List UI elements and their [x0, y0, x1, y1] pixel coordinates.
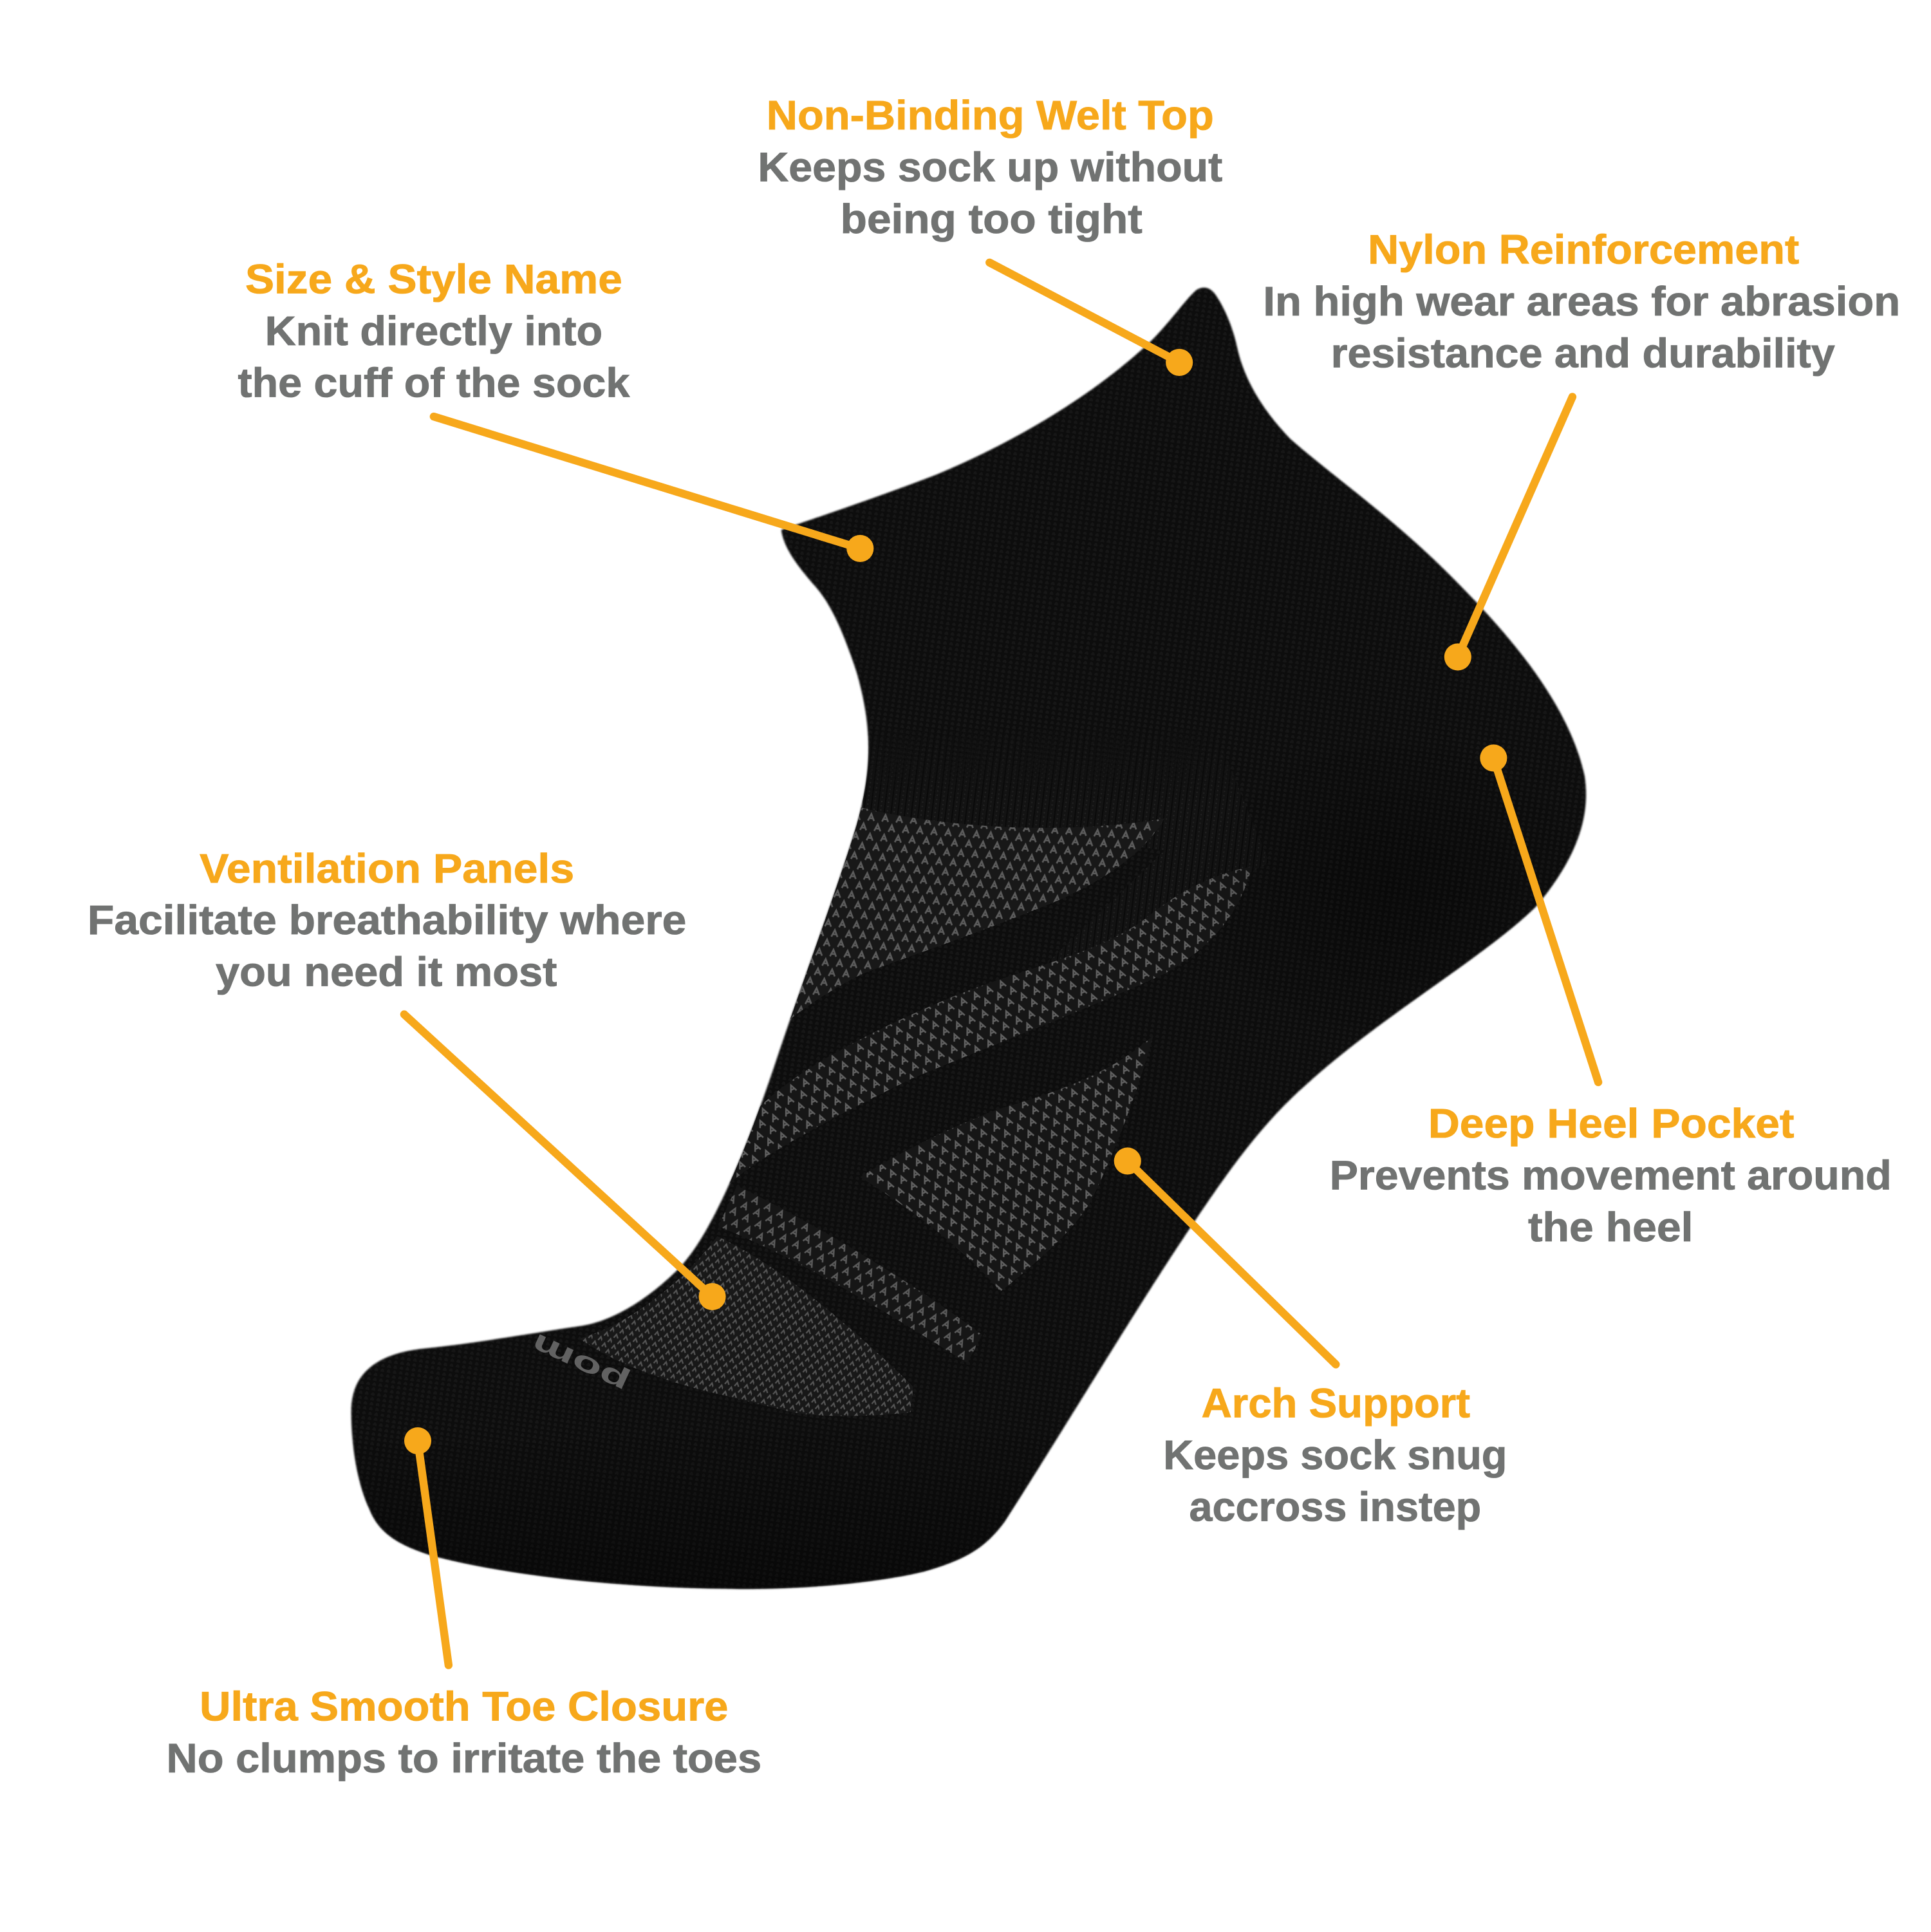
heading: Arch Support: [1202, 1380, 1470, 1427]
callout: Deep Heel Pocket: [1330, 744, 1892, 1250]
description line 2: the heel: [1528, 1204, 1693, 1250]
callout: Size and Style Name: [238, 256, 873, 562]
ribbed band: [863, 728, 1268, 963]
panel: arch triangle: [860, 1035, 1153, 1291]
sock body: [351, 288, 1586, 1589]
marker dot: [1444, 643, 1471, 671]
description line: No clumps to irritate the toes: [166, 1735, 761, 1781]
marker dot: [1114, 1147, 1141, 1175]
marker dot: [1480, 744, 1507, 771]
description line 1: In high wear areas for abrasion: [1263, 278, 1900, 324]
description line 1: Prevents movement around: [1330, 1152, 1892, 1199]
callout: Arch Support: [1114, 1147, 1507, 1530]
leader line: [989, 263, 1179, 362]
heading: Nylon Reinforcement: [1368, 227, 1799, 273]
leader line: [1458, 397, 1572, 657]
panel: upper ventilation: [783, 807, 1164, 1026]
leader line: [434, 417, 860, 549]
marker dot: [699, 1283, 726, 1310]
sock texture and ventilation panels: [345, 727, 1602, 1602]
sock illustration: [345, 288, 1602, 1602]
heel shading: [1245, 872, 1551, 1007]
callout: Nylon Reinforcement: [1263, 227, 1900, 671]
callout: Ventilation Panels: [88, 845, 726, 1310]
heading: Ultra Smooth Toe Closure: [200, 1683, 728, 1730]
panel: toe ventilation: [579, 1236, 913, 1416]
marker dot: [1166, 349, 1193, 376]
description line 1: Knit directly into: [265, 308, 602, 354]
panel: middle ventilation band: [727, 867, 1252, 1186]
description line 1: Facilitate breathability where: [88, 897, 686, 943]
description line 2: the cuff of the sock: [238, 359, 630, 406]
marker dot: [846, 535, 873, 562]
leader line: [1128, 1161, 1336, 1364]
toe shading: [354, 1452, 1041, 1589]
heading: Non-Binding Welt Top: [767, 92, 1214, 138]
leader line: [1493, 758, 1598, 1082]
description line 2: accross instep: [1189, 1483, 1481, 1530]
callout: Ultra Smooth Toe Closure: [166, 1427, 761, 1781]
description line 2: being too tight: [841, 196, 1143, 242]
leader line: [418, 1441, 449, 1665]
heading: Deep Heel Pocket: [1428, 1100, 1794, 1147]
heading: Size & Style Name: [245, 256, 622, 303]
panel: lower diagonal band: [718, 1186, 982, 1363]
description line 2: you need it most: [216, 949, 557, 995]
description line 2: resistance and durability: [1331, 330, 1835, 377]
knit-in logo: pom: [527, 1327, 633, 1400]
heading: Ventilation Panels: [200, 845, 574, 892]
callout: Non-Binding Welt Top: [758, 92, 1222, 376]
leader line: [404, 1015, 713, 1297]
description line 1: Keeps sock up without: [758, 144, 1222, 190]
marker dot: [404, 1427, 431, 1454]
description line 1: Keeps sock snug: [1163, 1432, 1507, 1478]
